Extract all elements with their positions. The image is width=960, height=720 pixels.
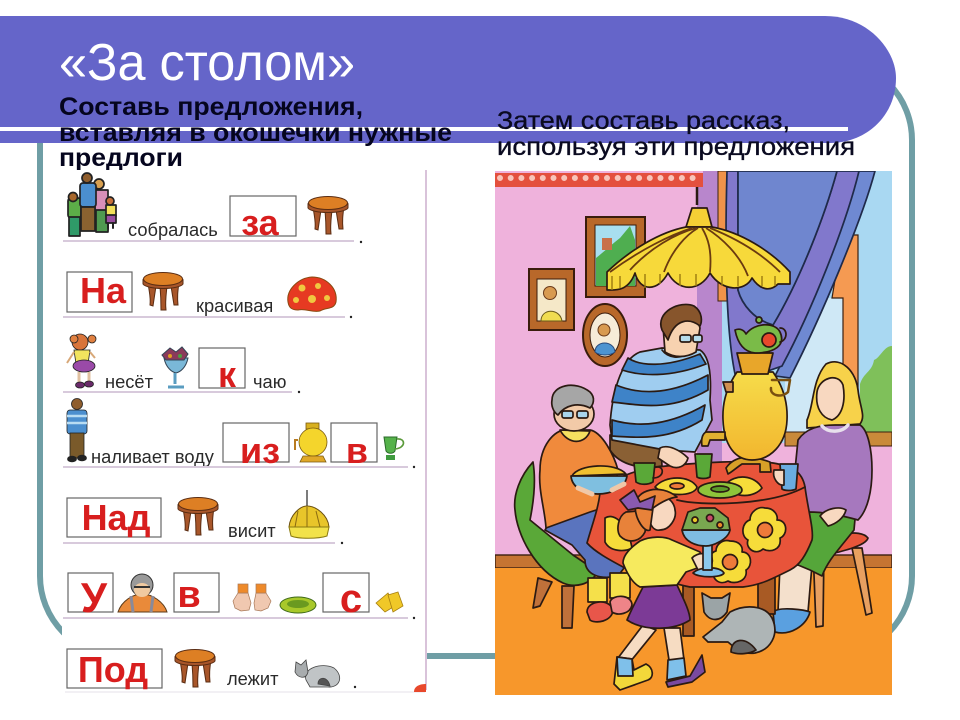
father's hand: [658, 447, 688, 468]
icon: cat: [295, 660, 340, 687]
panel: worksheet: [62, 170, 426, 692]
samovar with teapot: [702, 317, 790, 474]
icon: hands: [233, 584, 271, 611]
bush behind window: [860, 346, 892, 440]
row 6: grandmother has a plate with cheese in her hands: [63, 573, 415, 621]
icon: tablecloth: [288, 277, 336, 311]
left instruction text: Составь предложения,: [59, 93, 363, 121]
green skirt: [798, 508, 856, 576]
row 6: grandmother has a plate with cheese in her hands: в: [177, 574, 201, 616]
left instruction text: [59, 93, 452, 172]
cloth flowers: [605, 477, 786, 583]
cat: [702, 593, 775, 654]
icon: cup: [384, 437, 404, 460]
row 4: man pours water from the samovar into the cup: в: [346, 430, 368, 471]
title: «За столом»: [59, 34, 355, 92]
left slipper: [614, 657, 652, 690]
row 3: girl carries a vase to tea: [63, 334, 300, 395]
father: [610, 304, 712, 467]
girl: [614, 489, 712, 690]
window sill: [785, 432, 892, 446]
teal rounded frame: [40, 60, 912, 656]
right instruction text: Затем составь рассказ,: [497, 107, 790, 135]
sweater: [623, 537, 703, 587]
icon: grandmother: [118, 574, 167, 612]
window pane: [785, 298, 843, 438]
row 4: man pours water from the samovar into the cup: наливает воду: [91, 446, 215, 467]
left instruction text: вставляя в окошечки нужные: [59, 119, 452, 147]
head: [553, 406, 595, 432]
top border: [495, 173, 703, 187]
handles: [723, 382, 733, 392]
row 5: lamp hangs over the table: висит: [228, 520, 276, 541]
header band: [0, 16, 896, 143]
window sky: [720, 171, 892, 443]
bow: [620, 490, 655, 510]
window frame: [831, 234, 859, 390]
hand on knee: [820, 508, 846, 526]
ponytail: [618, 510, 648, 541]
body: [723, 372, 787, 460]
hair: [635, 489, 677, 530]
icon: man: [67, 398, 87, 462]
row 5: lamp hangs over the table: Над: [82, 497, 151, 538]
necklace: [822, 425, 848, 431]
row 6: grandmother has a plate with cheese in her hands: У: [81, 574, 108, 621]
purple blouse: [790, 425, 872, 520]
stool: [813, 548, 872, 627]
row 4: man pours water from the samovar into the cup: [63, 398, 415, 471]
right instruction text: [497, 107, 855, 161]
row 6: grandmother has a plate with cheese in her hands: с: [340, 577, 362, 621]
plate: [698, 482, 742, 498]
icon: samovar: [295, 423, 327, 462]
baseboard: [495, 555, 892, 568]
icon: lamp: [289, 490, 329, 538]
bowl of cheese: [572, 466, 626, 476]
skirt: [627, 585, 690, 628]
oval portrait: [583, 304, 627, 366]
grandmother: [540, 385, 632, 622]
icon: plate: [280, 597, 316, 613]
row 7: cat lies under the table: Под: [78, 649, 148, 690]
striped sweater: [610, 348, 712, 452]
row 1: family gathered at the table: за: [241, 202, 280, 243]
socks and slippers: [588, 573, 630, 602]
crown: [737, 353, 773, 374]
row 2: tablecloth on the table: На: [80, 270, 127, 311]
cardigan: [540, 430, 618, 528]
table legs: [683, 570, 775, 636]
left instruction text: предлоги: [59, 144, 183, 172]
legs: [618, 625, 684, 662]
row 1: family gathered at the table: [63, 173, 362, 243]
icon: family: [68, 173, 116, 236]
icon: candy vase: [162, 347, 188, 387]
framed landscape: [586, 217, 645, 297]
illustration: family at the tea table: [495, 171, 892, 695]
right instruction text: используя эти предложения: [497, 133, 855, 161]
floor: [495, 568, 892, 695]
green cups: [634, 463, 655, 484]
hand: [692, 554, 712, 570]
slipper: [773, 609, 810, 633]
legs: [778, 565, 812, 612]
row 3: girl carries a vase to tea: к: [218, 354, 237, 395]
skirt: [545, 509, 630, 577]
teapot: [735, 325, 782, 353]
wall shadow: [697, 171, 722, 470]
blue cup: [780, 464, 798, 490]
row 4: man pours water from the samovar into the cup: из: [240, 430, 280, 471]
row 7: cat lies under the table: лежит: [227, 668, 279, 689]
curtain: [726, 171, 875, 378]
pendant lamp: [607, 187, 790, 290]
row 2: tablecloth on the table: [63, 270, 352, 318]
icon: table: [308, 196, 348, 234]
right slipper: [666, 655, 705, 687]
face: [648, 496, 675, 530]
icon: cheese: [376, 592, 403, 612]
header white rule: [0, 127, 848, 131]
row 2: tablecloth on the table: красивая: [196, 295, 273, 316]
row 3: girl carries a vase to tea: чаю: [253, 371, 286, 392]
tablecloth: [571, 447, 812, 587]
candy bowl: [682, 508, 730, 577]
row 5: lamp hangs over the table: [63, 490, 343, 544]
head: [663, 315, 700, 356]
icon: girl: [67, 334, 96, 388]
framed portrait: [529, 269, 574, 330]
chair: [515, 462, 598, 628]
row 1: family gathered at the table: собралась: [128, 219, 218, 240]
trousers: [610, 435, 662, 467]
hair: [807, 362, 863, 428]
row 3: girl carries a vase to tea: несёт: [105, 371, 154, 392]
tap: [702, 432, 725, 446]
row 7: cat lies under the table: [67, 649, 356, 690]
face: [817, 378, 844, 420]
wall: [495, 171, 892, 561]
legs: [726, 457, 771, 474]
mother: [773, 362, 872, 633]
